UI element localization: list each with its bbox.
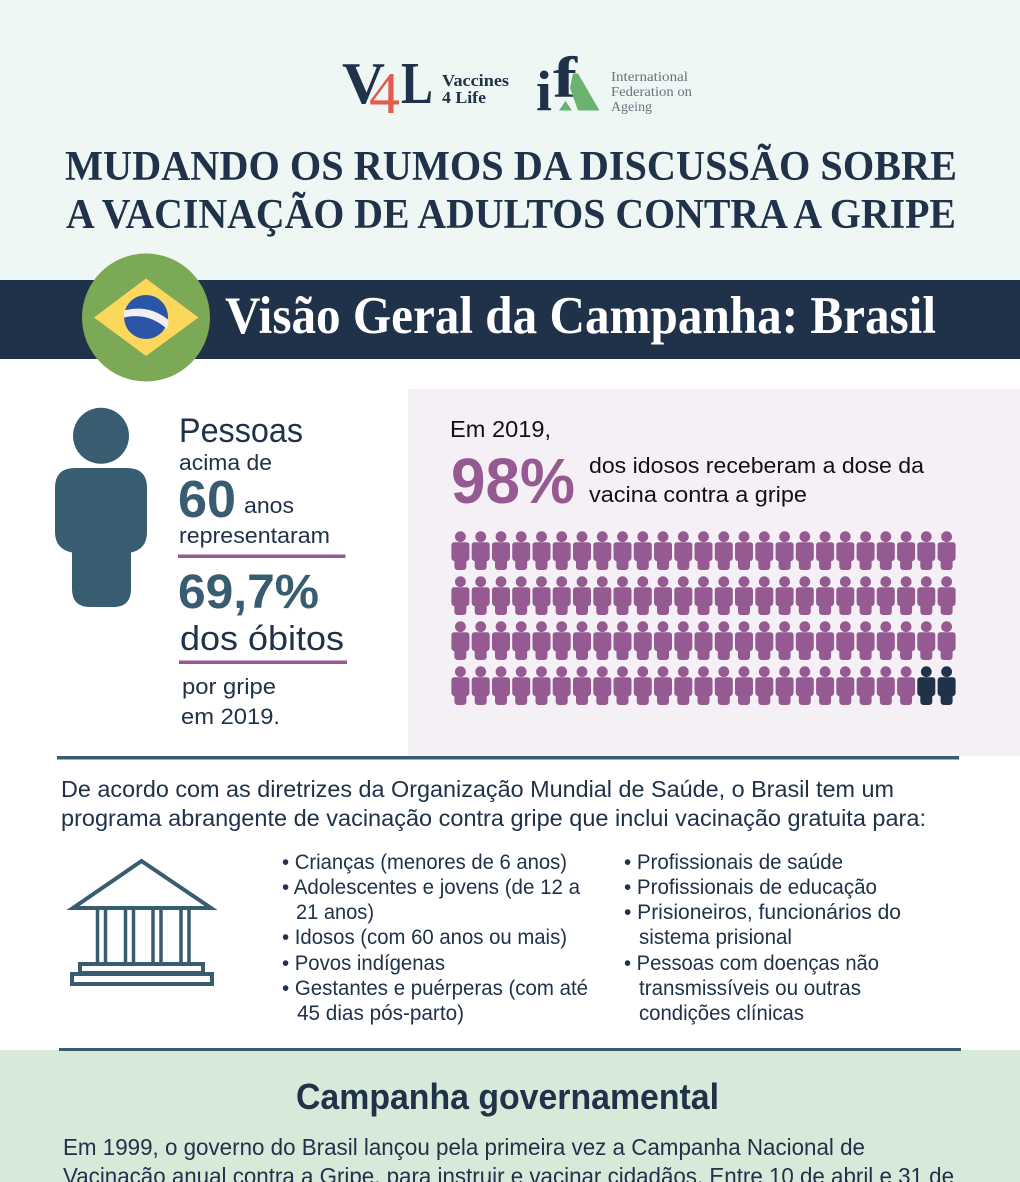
list: eligible groups left: • Povos indígenas — [282, 952, 445, 975]
pictogram: 98 of 100 people — [451, 531, 956, 705]
list: eligible groups right: transmissíveis ou outras — [639, 977, 861, 1000]
text: campaign description — [63, 1134, 954, 1182]
title — [65, 143, 957, 238]
statistic: deaths over 60: anos — [244, 493, 294, 518]
statistic: 98%: 98% — [451, 445, 575, 517]
panel: vaccination 98% — [408, 389, 1020, 756]
text: seniors received dose: dos idosos receberam a dose da — [589, 453, 925, 478]
statistic: deaths over 60: acima de — [179, 450, 272, 475]
panel: government campaign — [0, 1048, 1020, 1182]
logo: International Federation on Ageing: f — [553, 45, 578, 110]
text: programme intro — [61, 776, 926, 831]
list: eligible groups left: • Idosos (com 60 anos ou mais) — [282, 926, 567, 949]
statistic: deaths over 60 — [178, 412, 347, 729]
logo: Vaccines 4 Life — [342, 50, 509, 126]
logo: Vaccines 4 Life: L — [401, 50, 433, 116]
list: eligible groups right — [624, 851, 901, 1025]
text: programme intro: programa abrangente de vacinação contra gripe que inclui vacinação gratuita para: — [61, 805, 926, 831]
text: campaign description: Em 1999, o governo do Brasil lançou pela primeira vez a Campanha Nacional de — [63, 1134, 865, 1160]
logo: Vaccines 4 Life: Vaccines — [442, 71, 509, 90]
list: eligible groups right: • Pessoas com doenças não — [624, 952, 879, 975]
title: A VACINAÇÃO DE ADULTOS CONTRA A GRIPE — [66, 191, 956, 238]
list: eligible groups left — [282, 851, 588, 1025]
statistic: deaths over 60: por gripe — [182, 674, 276, 699]
text: in 2019: Em 2019, — [450, 416, 551, 442]
logo: Vaccines 4 Life: 4 Life — [442, 88, 486, 107]
icon: Brazil flag — [82, 254, 210, 382]
statistic: deaths over 60: representaram — [179, 523, 330, 548]
banner — [0, 280, 1020, 359]
logo: International Federation on Ageing — [536, 45, 692, 124]
list: eligible groups right: sistema prisional — [639, 926, 792, 949]
list: eligible groups right: • Prisioneiros, funcionários do — [624, 901, 901, 924]
statistic: deaths over 60: dos óbitos — [180, 620, 344, 658]
title: MUDANDO OS RUMOS DA DISCUSSÃO SOBRE — [65, 143, 957, 190]
list: eligible groups right: condições clínicas — [639, 1002, 804, 1025]
list: eligible groups left: • Crianças (menores de 6 anos) — [282, 851, 567, 874]
text: seniors received dose — [589, 453, 925, 507]
statistic: deaths over 60: em 2019. — [181, 704, 280, 729]
statistic: deaths over 60: 69,7% — [178, 566, 319, 619]
logo: International Federation on Ageing: Ageing — [611, 99, 652, 114]
logo: Vaccines 4 Life: V — [342, 50, 385, 116]
list: eligible groups left: 21 anos) — [296, 901, 374, 924]
statistic: deaths over 60: Pessoas — [179, 412, 303, 450]
text: programme intro: De acordo com as diretrizes da Organização Mundial de Saúde, o Brasil tem um — [61, 776, 894, 802]
heading: government campaign: Campanha governamental — [296, 1076, 719, 1117]
logo: International Federation on Ageing: i — [536, 60, 552, 124]
text: seniors received dose: vacina contra a gripe — [589, 482, 807, 507]
logo: Vaccines 4 Life: 4 — [369, 60, 400, 126]
logo: International Federation on Ageing: Federation on — [611, 84, 692, 99]
statistic: deaths over 60: 60 — [178, 471, 236, 529]
list: eligible groups left: 45 dias pós-parto) — [297, 1002, 464, 1025]
header background — [0, 0, 1020, 281]
list: eligible groups left: • Gestantes e puérperas (com até — [282, 977, 588, 1000]
banner heading: Visão Geral da Campanha: Brasil — [225, 287, 936, 345]
list: eligible groups left: • Adolescentes e jovens (de 12 a — [282, 876, 580, 899]
list: eligible groups right: • Profissionais de saúde — [624, 851, 843, 874]
logo: International Federation on Ageing: International — [611, 69, 688, 84]
icon: government building — [72, 861, 212, 984]
icon: person — [55, 408, 147, 607]
list: eligible groups right: • Profissionais de educação — [624, 876, 877, 899]
